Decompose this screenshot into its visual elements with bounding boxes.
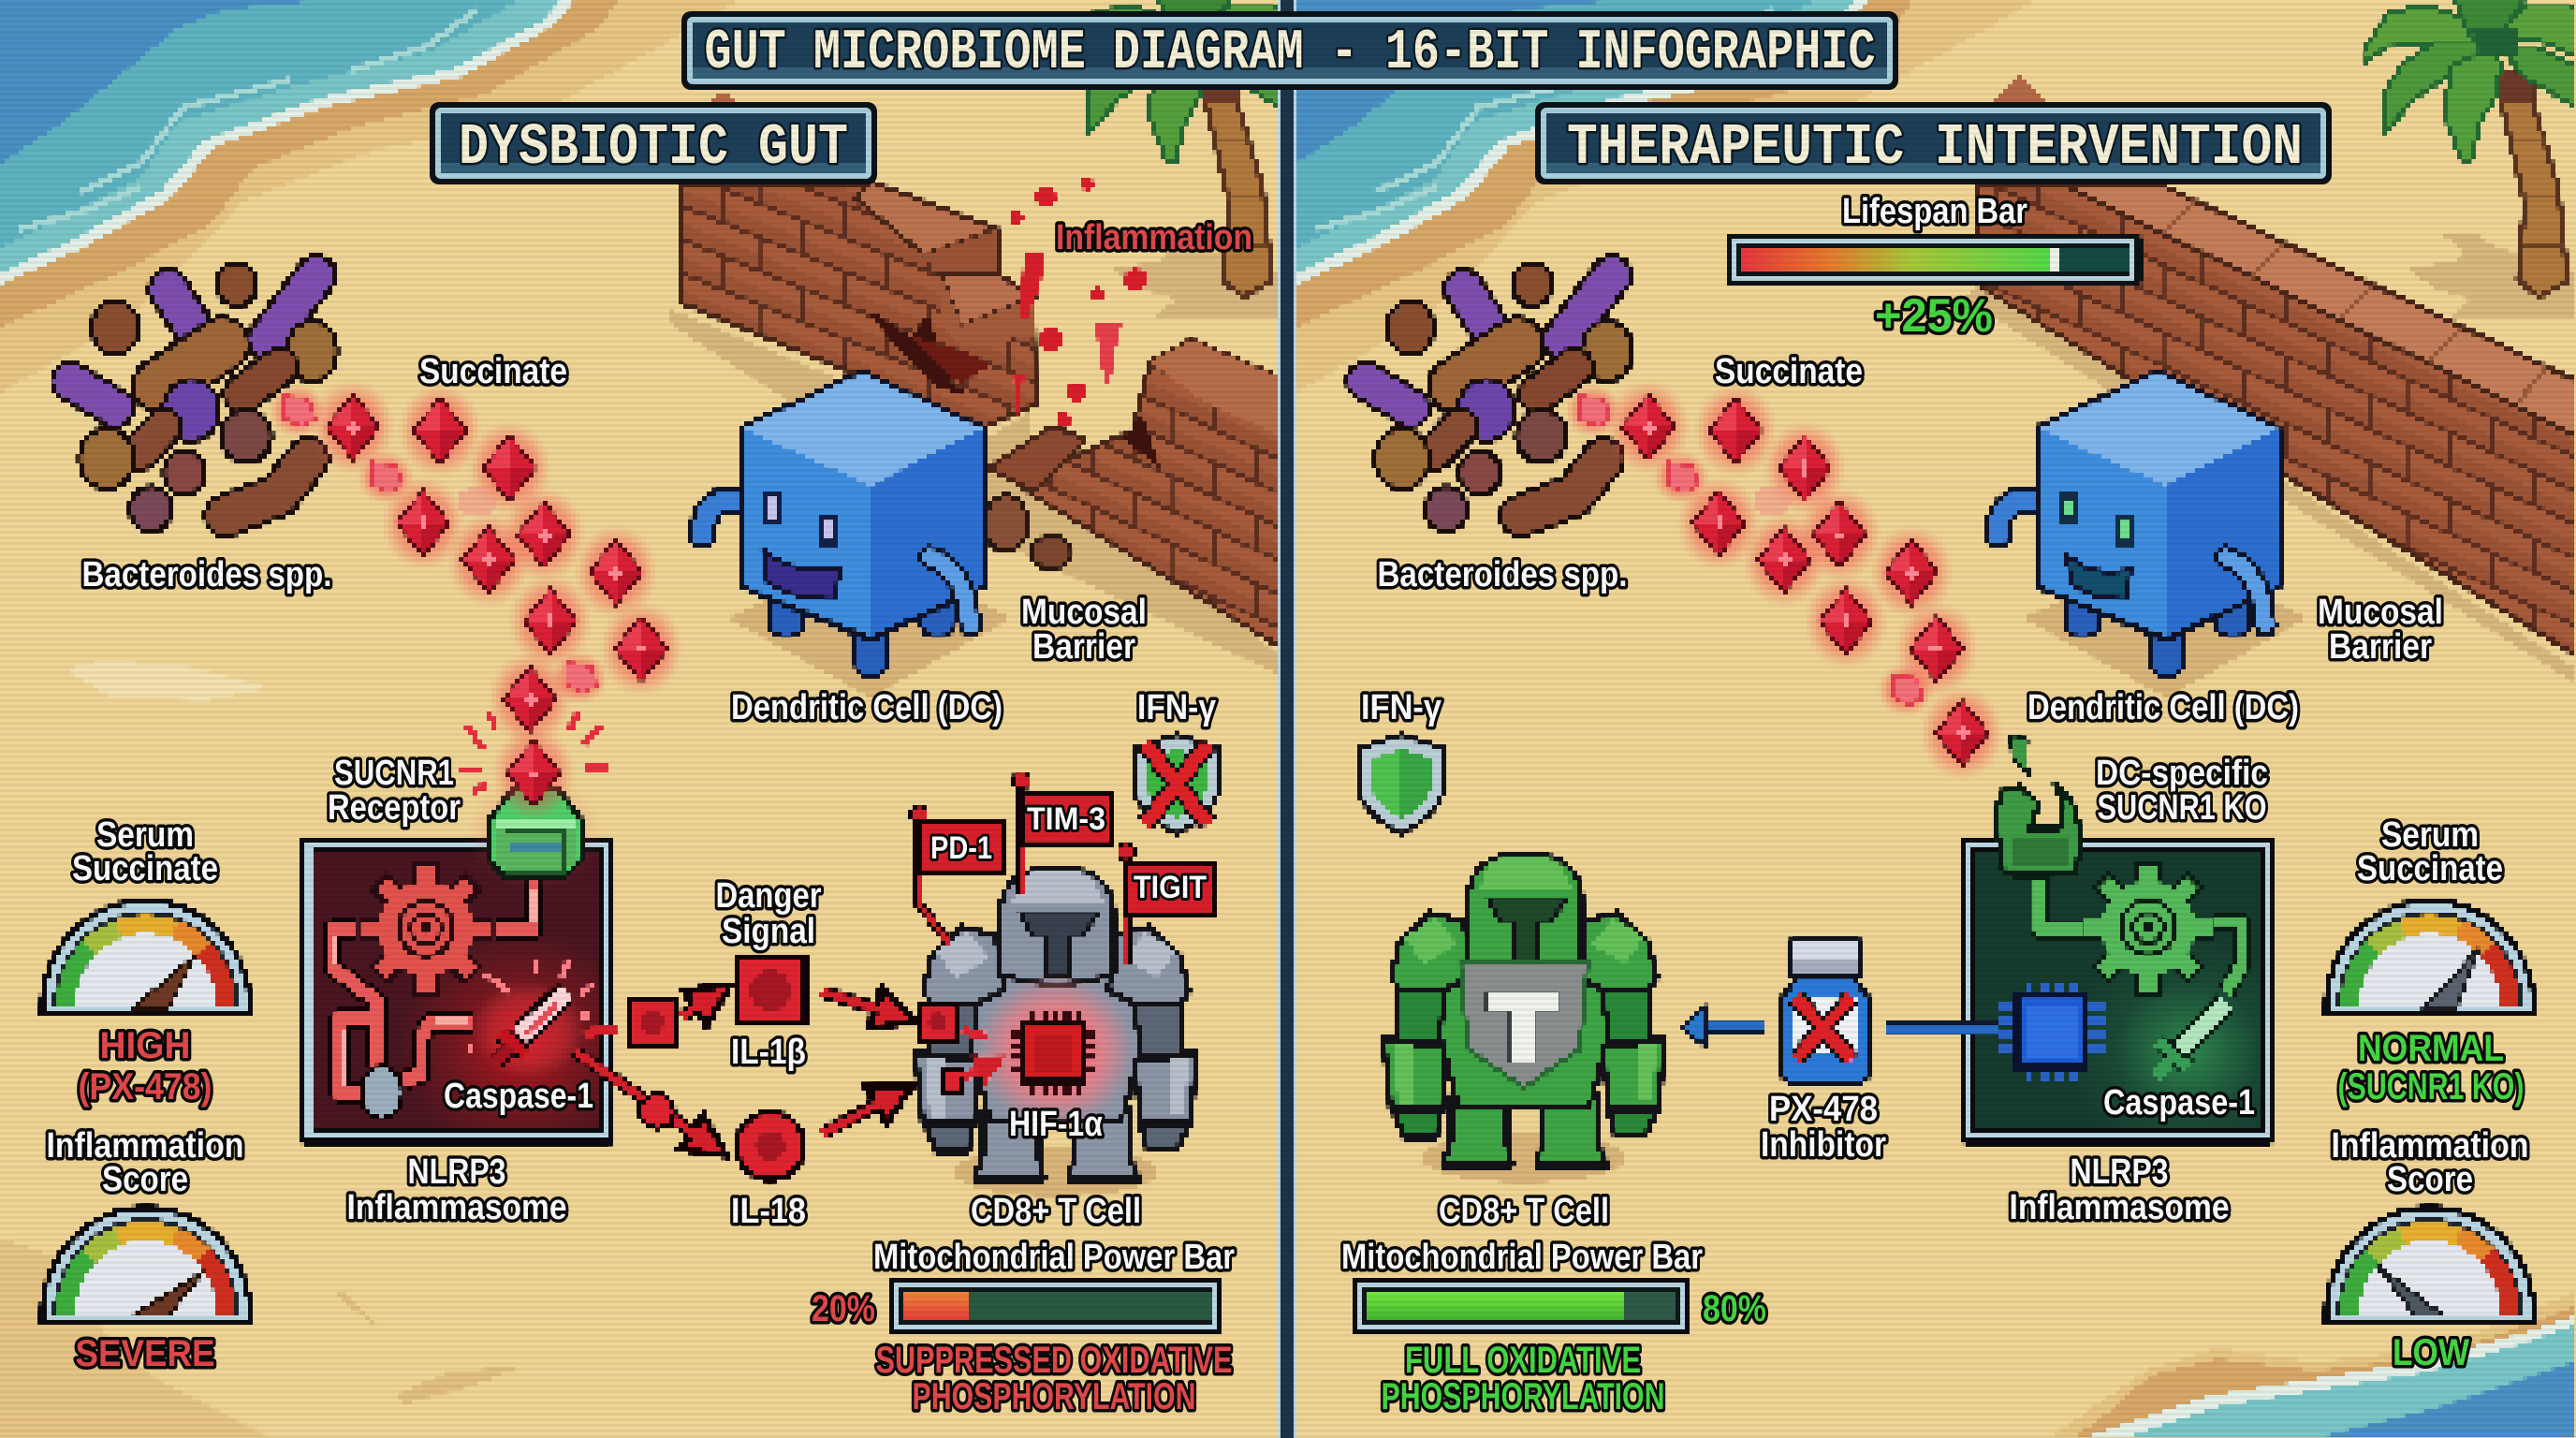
status: high px-478: HIGH (99, 1025, 191, 1066)
bacteroides cluster (70, 263, 337, 532)
succinate crystal trail (270, 380, 682, 746)
nlrp3 inflammasome box (1961, 836, 2275, 1145)
icon: disabled sword (2157, 1002, 2226, 1077)
label: serum succinate: Serum (96, 815, 194, 855)
label: nlrp3 inflammasome (2009, 1152, 2230, 1227)
label: nlrp3 inflammasome: Inflammasome (2009, 1188, 2230, 1227)
label: danger signal: Signal (722, 912, 815, 951)
status: suppressed oxidative phosphorylation: SUPPRESSED OXIDATIVE (876, 1340, 1232, 1381)
mitochondrial power bar 80% (1354, 1278, 1690, 1335)
mucosal barrier brick wall, broken (669, 92, 1288, 679)
label: dendritic cell: Dendritic Cell (DC) (731, 688, 1003, 727)
cytokine cascade arrows (575, 991, 889, 1140)
icon: gear (2083, 862, 2214, 993)
ifn-gamma shield crossed out (1134, 735, 1220, 833)
label: nlrp3 inflammasome: Inflammasome (346, 1188, 567, 1227)
intact mucosal barrier brick wall (1966, 76, 2576, 683)
label: dc-specific sucnr1 ko: SUCNR1 KO (2097, 788, 2267, 828)
value: 80 percent: 80% (1703, 1288, 1766, 1329)
label: dc-specific sucnr1 ko: DC-specific (2096, 754, 2268, 793)
label: pd-1: PD-1 (930, 830, 992, 866)
label: nlrp3 inflammasome (346, 1152, 567, 1227)
ifn-gamma shield (1358, 735, 1444, 833)
label: mucosal barrier (1021, 593, 1147, 667)
label: cd8 t cell: CD8+ T Cell (1439, 1192, 1609, 1231)
label: danger signal: Danger (715, 876, 822, 916)
label: inflammation score: Inflammation (47, 1126, 243, 1166)
label: tigit: TIGIT (1134, 870, 1207, 905)
label: serum succinate: Succinate (2357, 849, 2503, 888)
label: inflammation score: Score (2387, 1160, 2473, 1199)
label: px-478 inhibitor: PX-478 (1769, 1090, 1878, 1129)
broken sucnr1 receptor (1995, 735, 2082, 875)
pipes (332, 877, 534, 1093)
label: ifn-gamma: IFN-γ (1361, 688, 1442, 727)
flag tigit (1119, 844, 1216, 962)
heading: dysbiotic gut: DYSBIOTIC GUT (459, 114, 848, 181)
status: full oxidative phosphorylation: PHOSPHORYLATION (1382, 1376, 1664, 1417)
title text: GUT MICROBIOME DIAGRAM - 16-BIT INFOGRAPHIC (704, 22, 1876, 85)
label: ifn-gamma: IFN-γ (1137, 688, 1216, 727)
label: dc-specific sucnr1 ko (2096, 754, 2268, 828)
label: px-478 inhibitor (1761, 1090, 1886, 1165)
label: inflammation score (47, 1126, 243, 1199)
label: inflammation score: Score (102, 1160, 188, 1199)
danger signal small square (628, 1000, 675, 1046)
label: inflammation score (2331, 1126, 2529, 1199)
label: mucosal barrier: Mucosal (1021, 593, 1147, 632)
flag tim-3 (1013, 772, 1113, 893)
label: sucnr1 receptor: Receptor (328, 788, 461, 828)
label: lifespan bar: Lifespan Bar (1842, 192, 2027, 231)
label: mucosal barrier: Mucosal (2318, 593, 2443, 632)
status: severe: SEVERE (75, 1333, 215, 1374)
gauge: serum succinate normal (2323, 898, 2537, 1018)
label: inflammation: Inflammation (1056, 218, 1252, 257)
status: high px-478 (79, 1025, 212, 1108)
label: serum succinate: Serum (2381, 815, 2479, 855)
inflammation drops (1010, 177, 1147, 427)
icon: caspase sword (466, 960, 593, 1078)
label: sucnr1 receptor (328, 754, 461, 828)
status: full oxidative phosphorylation: FULL OXIDATIVE (1405, 1340, 1641, 1381)
status: high px-478: (PX-478) (79, 1066, 212, 1108)
label: mitochondrial power bar: Mitochondrial Power Bar (1341, 1238, 1703, 1277)
dendritic cell (1998, 374, 2306, 697)
gauge: inflammation severe (39, 1205, 253, 1325)
label: mucosal barrier: Barrier (1032, 627, 1135, 667)
label: nlrp3 inflammasome: NLRP3 (408, 1152, 505, 1192)
label: inflammation score: Inflammation (2331, 1126, 2529, 1166)
label: mucosal barrier (2318, 593, 2443, 667)
il-1 beta square (737, 957, 805, 1024)
icon: gear (360, 863, 491, 994)
gauge: serum succinate high (39, 898, 253, 1018)
label: serum succinate (72, 815, 218, 888)
center divider (1278, 0, 1296, 1438)
value: 20 percent: 20% (812, 1288, 875, 1329)
status: normal sucnr1 ko: NORMAL (2358, 1028, 2504, 1069)
succinate crystal trail (1565, 380, 2003, 780)
px-478 inhibitor bottle (1782, 938, 1868, 1084)
dendritic cell (702, 374, 1011, 697)
flag pd-1 (910, 806, 1003, 944)
label: px-478 inhibitor: Inhibitor (1761, 1125, 1886, 1165)
label: mitochondrial power bar: Mitochondrial Power Bar (873, 1238, 1235, 1277)
label: sucnr1 receptor: SUCNR1 (334, 754, 454, 793)
label: danger signal (715, 876, 822, 951)
status: normal sucnr1 ko: (SUCNR1 KO) (2338, 1066, 2524, 1108)
label: dendritic cell: Dendritic Cell (DC) (2027, 688, 2299, 727)
label: bacteroides: Bacteroides spp. (1378, 555, 1627, 594)
label: cd8 t cell: CD8+ T Cell (971, 1192, 1141, 1231)
label: tim-3: TIM-3 (1027, 801, 1105, 837)
panel: therapeutic intervention (1341, 76, 2576, 1417)
label: serum succinate (2357, 815, 2503, 888)
value: plus 25 percent: +25% (1875, 289, 1993, 342)
healthy cd8 t cell (1383, 854, 1664, 1182)
hif-1 alpha chip (976, 975, 1134, 1128)
panel: dysbiotic gut (39, 92, 1288, 1417)
label: il-1 beta: IL-1β (731, 1033, 806, 1072)
label: caspase-1: Caspase-1 (2103, 1083, 2255, 1123)
status: normal sucnr1 ko (2338, 1028, 2524, 1108)
status: suppressed oxidative phosphorylation: PHOSPHORYLATION (912, 1376, 1196, 1417)
heading: therapeutic intervention: THERAPEUTIC INTERVENTION (1567, 114, 2303, 181)
label: caspase-1: Caspase-1 (444, 1077, 593, 1116)
sucnr1 receptor with bound crystal (459, 712, 608, 891)
status: full oxidative phosphorylation (1382, 1340, 1664, 1417)
bacteroides cluster (1366, 263, 1632, 532)
status: suppressed oxidative phosphorylation (876, 1340, 1232, 1417)
status: low: LOW (2393, 1332, 2469, 1373)
label: succinate: Succinate (419, 352, 567, 391)
inhibition arrows (1682, 1007, 1998, 1047)
exhausted cd8 t cell (915, 868, 1196, 1196)
label: serum succinate: Succinate (72, 849, 218, 888)
mitochondrial power bar 20% (887, 1278, 1223, 1335)
label: nlrp3 inflammasome: NLRP3 (2071, 1152, 2168, 1192)
gauge: inflammation low (2323, 1205, 2537, 1325)
title banner (681, 11, 1898, 90)
label: bacteroides: Bacteroides spp. (82, 555, 331, 594)
nlrp3 inflammasome box (300, 836, 614, 1145)
label: hif-1 alpha: HIF-1α (1009, 1105, 1103, 1144)
label: il-18: IL-18 (731, 1192, 806, 1231)
il-18 circles (640, 1094, 804, 1180)
label: succinate: Succinate (1715, 352, 1863, 391)
lifespan bar (1725, 233, 2142, 286)
pipes (2040, 875, 2242, 992)
label: mucosal barrier: Barrier (2329, 627, 2432, 667)
icon: blue chip (1998, 983, 2105, 1083)
